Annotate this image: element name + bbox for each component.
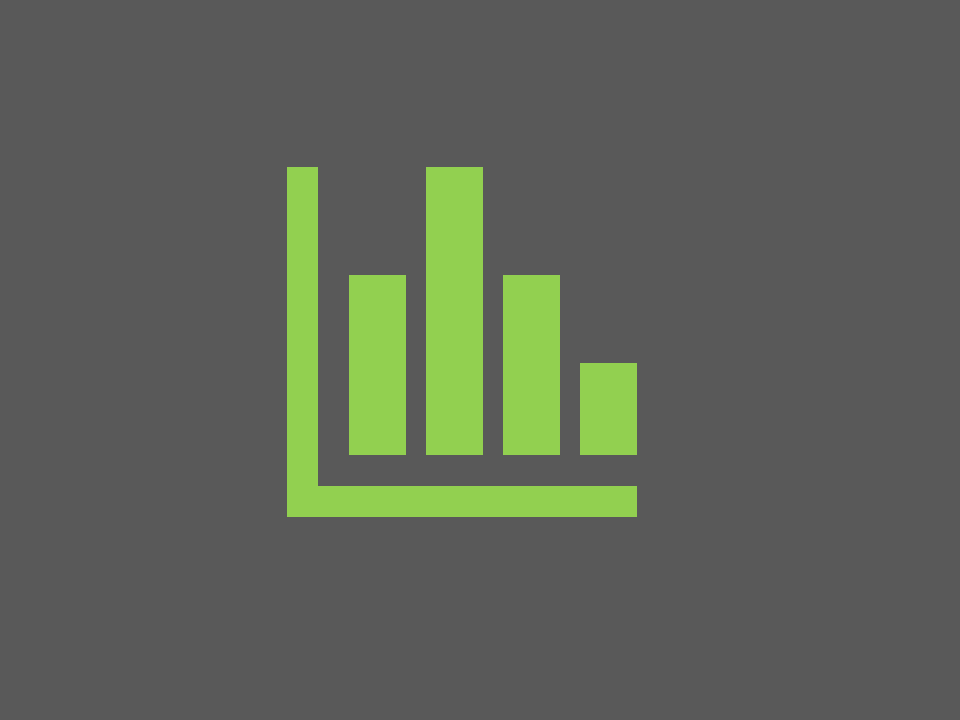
- bar 3: [503, 275, 560, 455]
- bar 2: [426, 167, 483, 455]
- bar 4: [580, 363, 637, 455]
- chart axes: [287, 167, 637, 517]
- bar 1: [349, 275, 406, 455]
